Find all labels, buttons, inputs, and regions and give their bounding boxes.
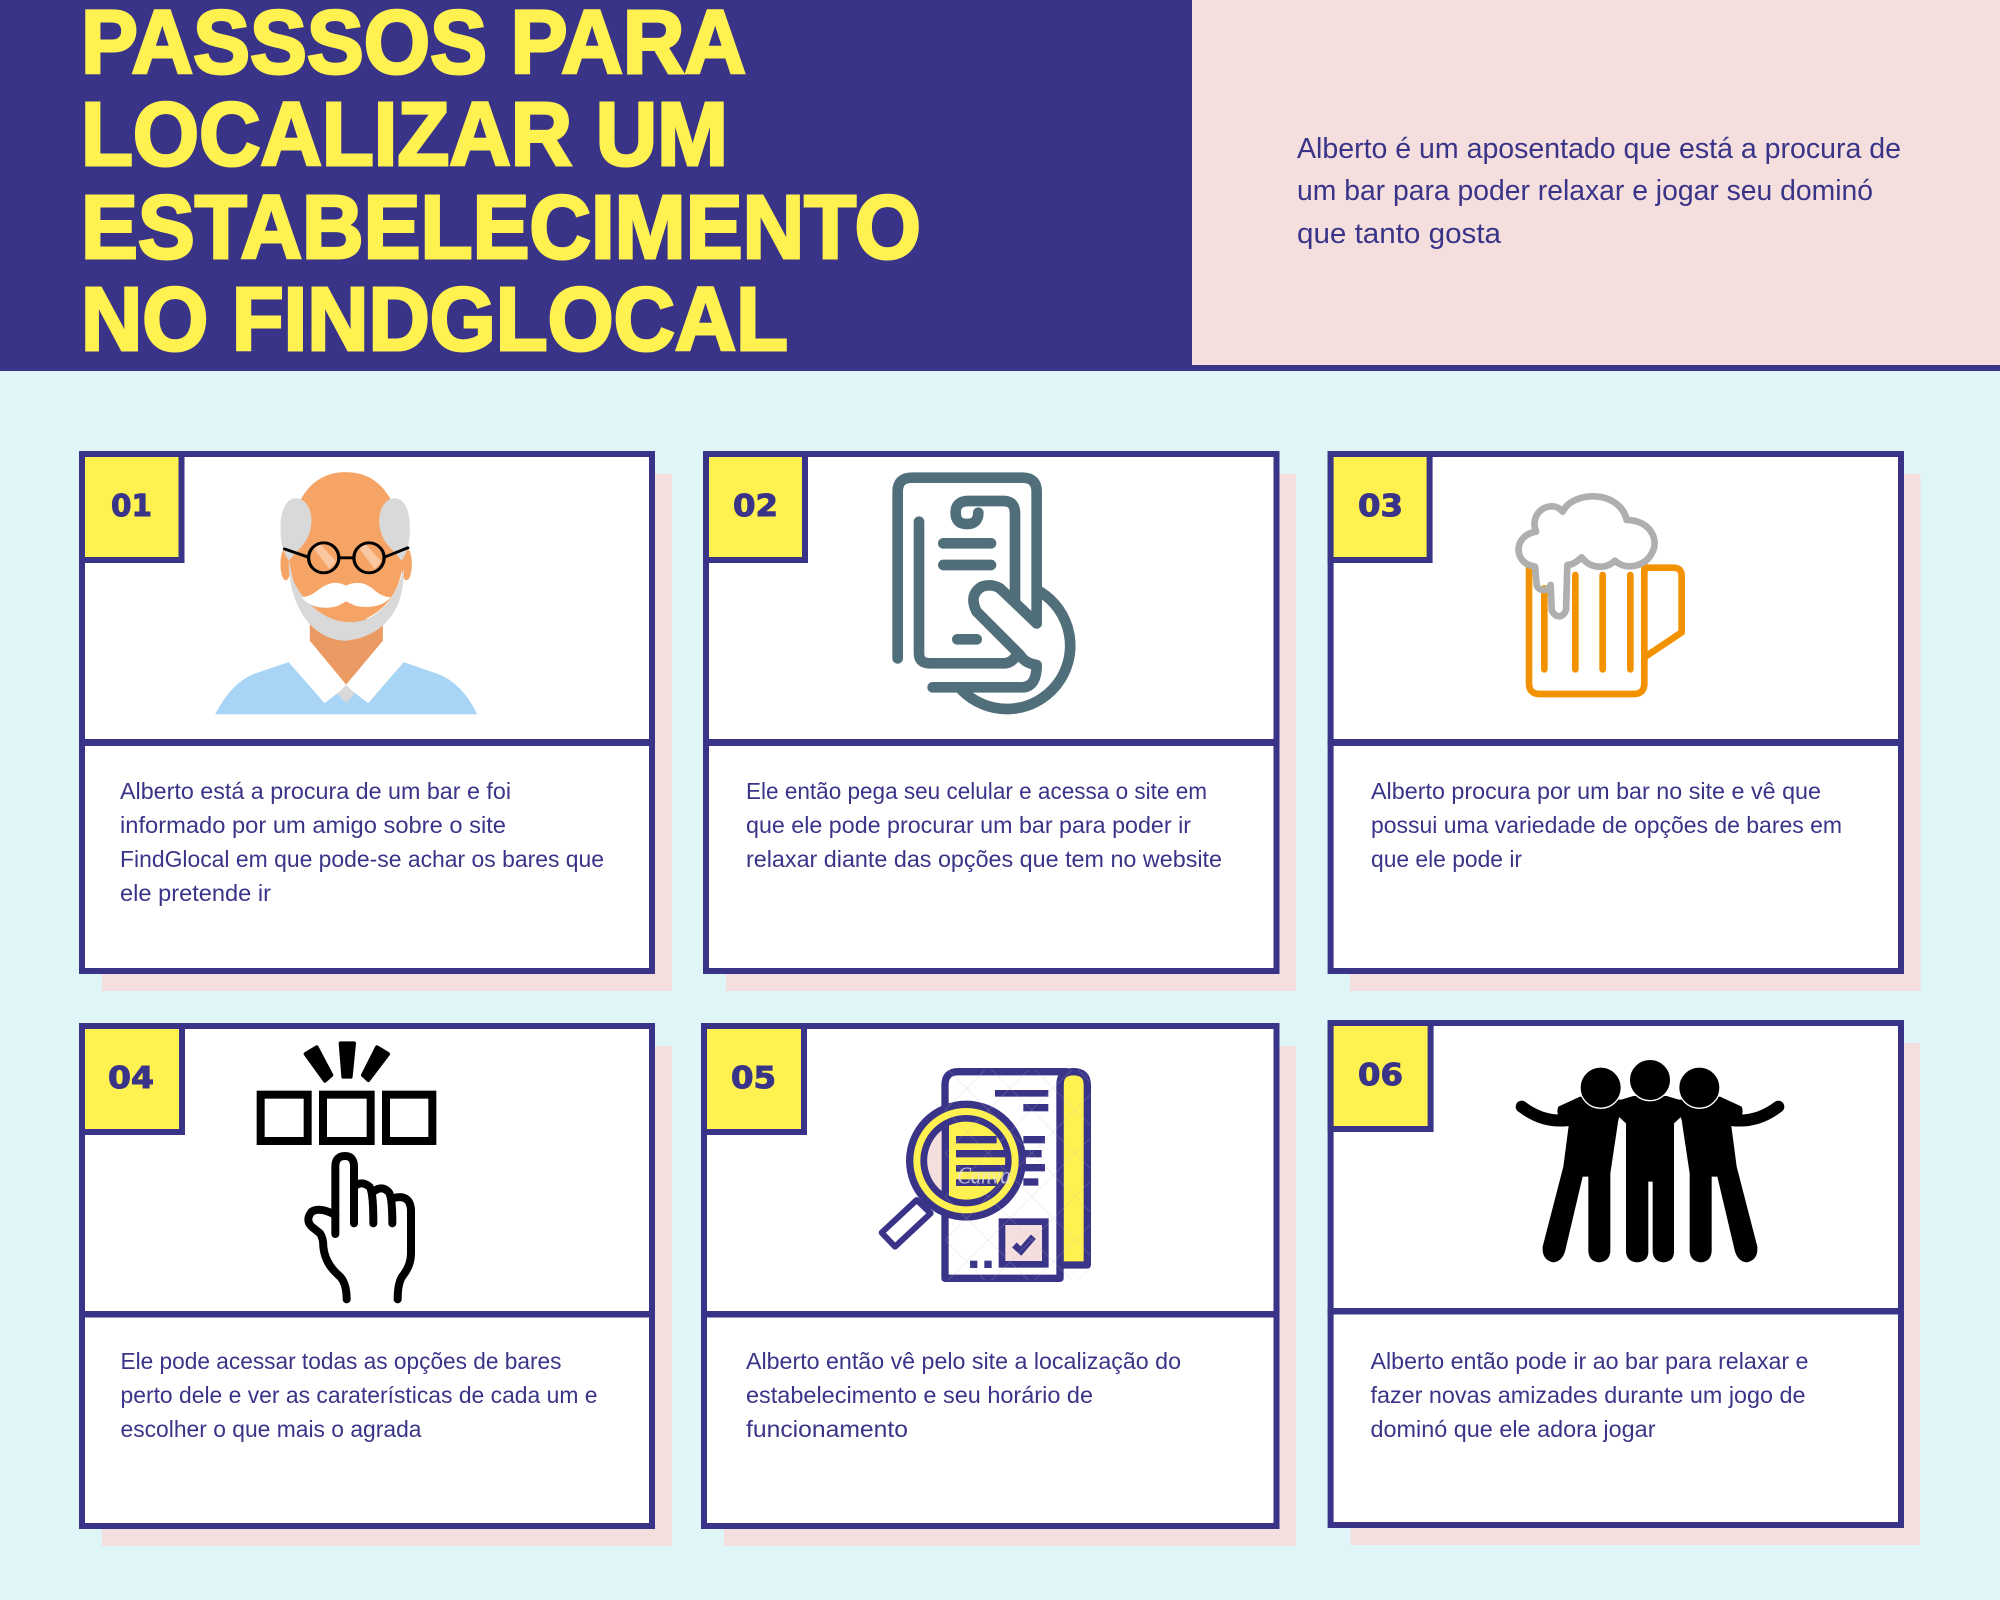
step 02 text: Ele então pega seu celular e acessa o site em <box>746 778 1207 804</box>
title: ESTABELECIMENTO <box>81 178 921 278</box>
step number 05: 05 <box>731 1061 776 1096</box>
icon: document under magnifying glass <box>882 1070 1090 1280</box>
step 04 text: perto dele e ver as caraterísticas de cada um e <box>120 1382 598 1408</box>
header band <box>0 0 2000 371</box>
title <box>81 0 921 370</box>
icon: three friends embracing <box>1522 1059 1778 1262</box>
step 06 text <box>1370 1348 1808 1442</box>
step 03 text: possui uma variedade de opções de bares em <box>1371 812 1842 838</box>
step 06 text: dominó que ele adora jogar <box>1370 1416 1656 1442</box>
step number 04: 04 <box>108 1061 154 1096</box>
step 05 text: funcionamento <box>746 1416 908 1442</box>
step 06 text: fazer novas amizades durante um jogo de <box>1370 1382 1806 1408</box>
step number 06: 06 <box>1358 1058 1403 1093</box>
step number 02: 02 <box>733 489 778 524</box>
step 03 text: que ele pode ir <box>1371 846 1522 872</box>
panel: step 03 <box>1328 454 1920 991</box>
stock watermark: Canva <box>957 1163 1011 1189</box>
panel: step 05 <box>701 1026 1296 1546</box>
step 03 text <box>1371 778 1842 872</box>
step 02 text <box>746 778 1222 872</box>
intro text: Alberto é um aposentado que está a procura de <box>1297 133 1901 165</box>
icon: beer mug <box>1519 496 1682 694</box>
step 04 text: Ele pode acessar todas as opções de bares <box>120 1348 562 1374</box>
icon: old man <box>215 472 477 714</box>
icon: finger pressing option <box>261 1043 432 1299</box>
intro text: um bar para poder relaxar e jogar seu dominó <box>1297 175 1873 207</box>
step number 03: 03 <box>1358 489 1403 524</box>
icon: phone in hand <box>898 478 1070 709</box>
step 05 text: estabelecimento e seu horário de <box>746 1382 1093 1408</box>
step 04 text: escolher o que mais o agrada <box>120 1416 422 1442</box>
panel: step 04 <box>79 1026 672 1546</box>
intro text <box>1297 133 1901 250</box>
title: LOCALIZAR UM <box>81 85 728 185</box>
step 01 text: informado por um amigo sobre o site <box>120 812 506 838</box>
panel: step 06 <box>1328 1023 1920 1545</box>
panel: step 01 <box>79 454 672 991</box>
step 02 text: que ele pode procurar um bar para poder ir <box>746 812 1191 838</box>
step 03 text: Alberto procura por um bar no site e vê que <box>1371 778 1821 804</box>
step number 01: 01 <box>111 489 152 524</box>
step 06 text: Alberto então pode ir ao bar para relaxar e <box>1370 1348 1808 1374</box>
step 04 text <box>120 1348 598 1442</box>
step 01 text: FindGlocal em que pode-se achar os bares que <box>120 846 604 872</box>
panel: step 02 <box>703 454 1296 991</box>
title: NO FINDGLOCAL <box>81 270 788 370</box>
step 01 text: ele pretende ir <box>120 880 271 906</box>
intro text: que tanto gosta <box>1297 218 1502 250</box>
panel: intro <box>1192 0 2000 365</box>
step 05 text: Alberto então vê pelo site a localização do <box>746 1348 1181 1374</box>
step 02 text: relaxar diante das opções que tem no website <box>746 846 1222 872</box>
step 01 text <box>120 778 604 906</box>
step 01 text: Alberto está a procura de um bar e foi <box>120 778 511 804</box>
step 05 text <box>746 1348 1181 1442</box>
